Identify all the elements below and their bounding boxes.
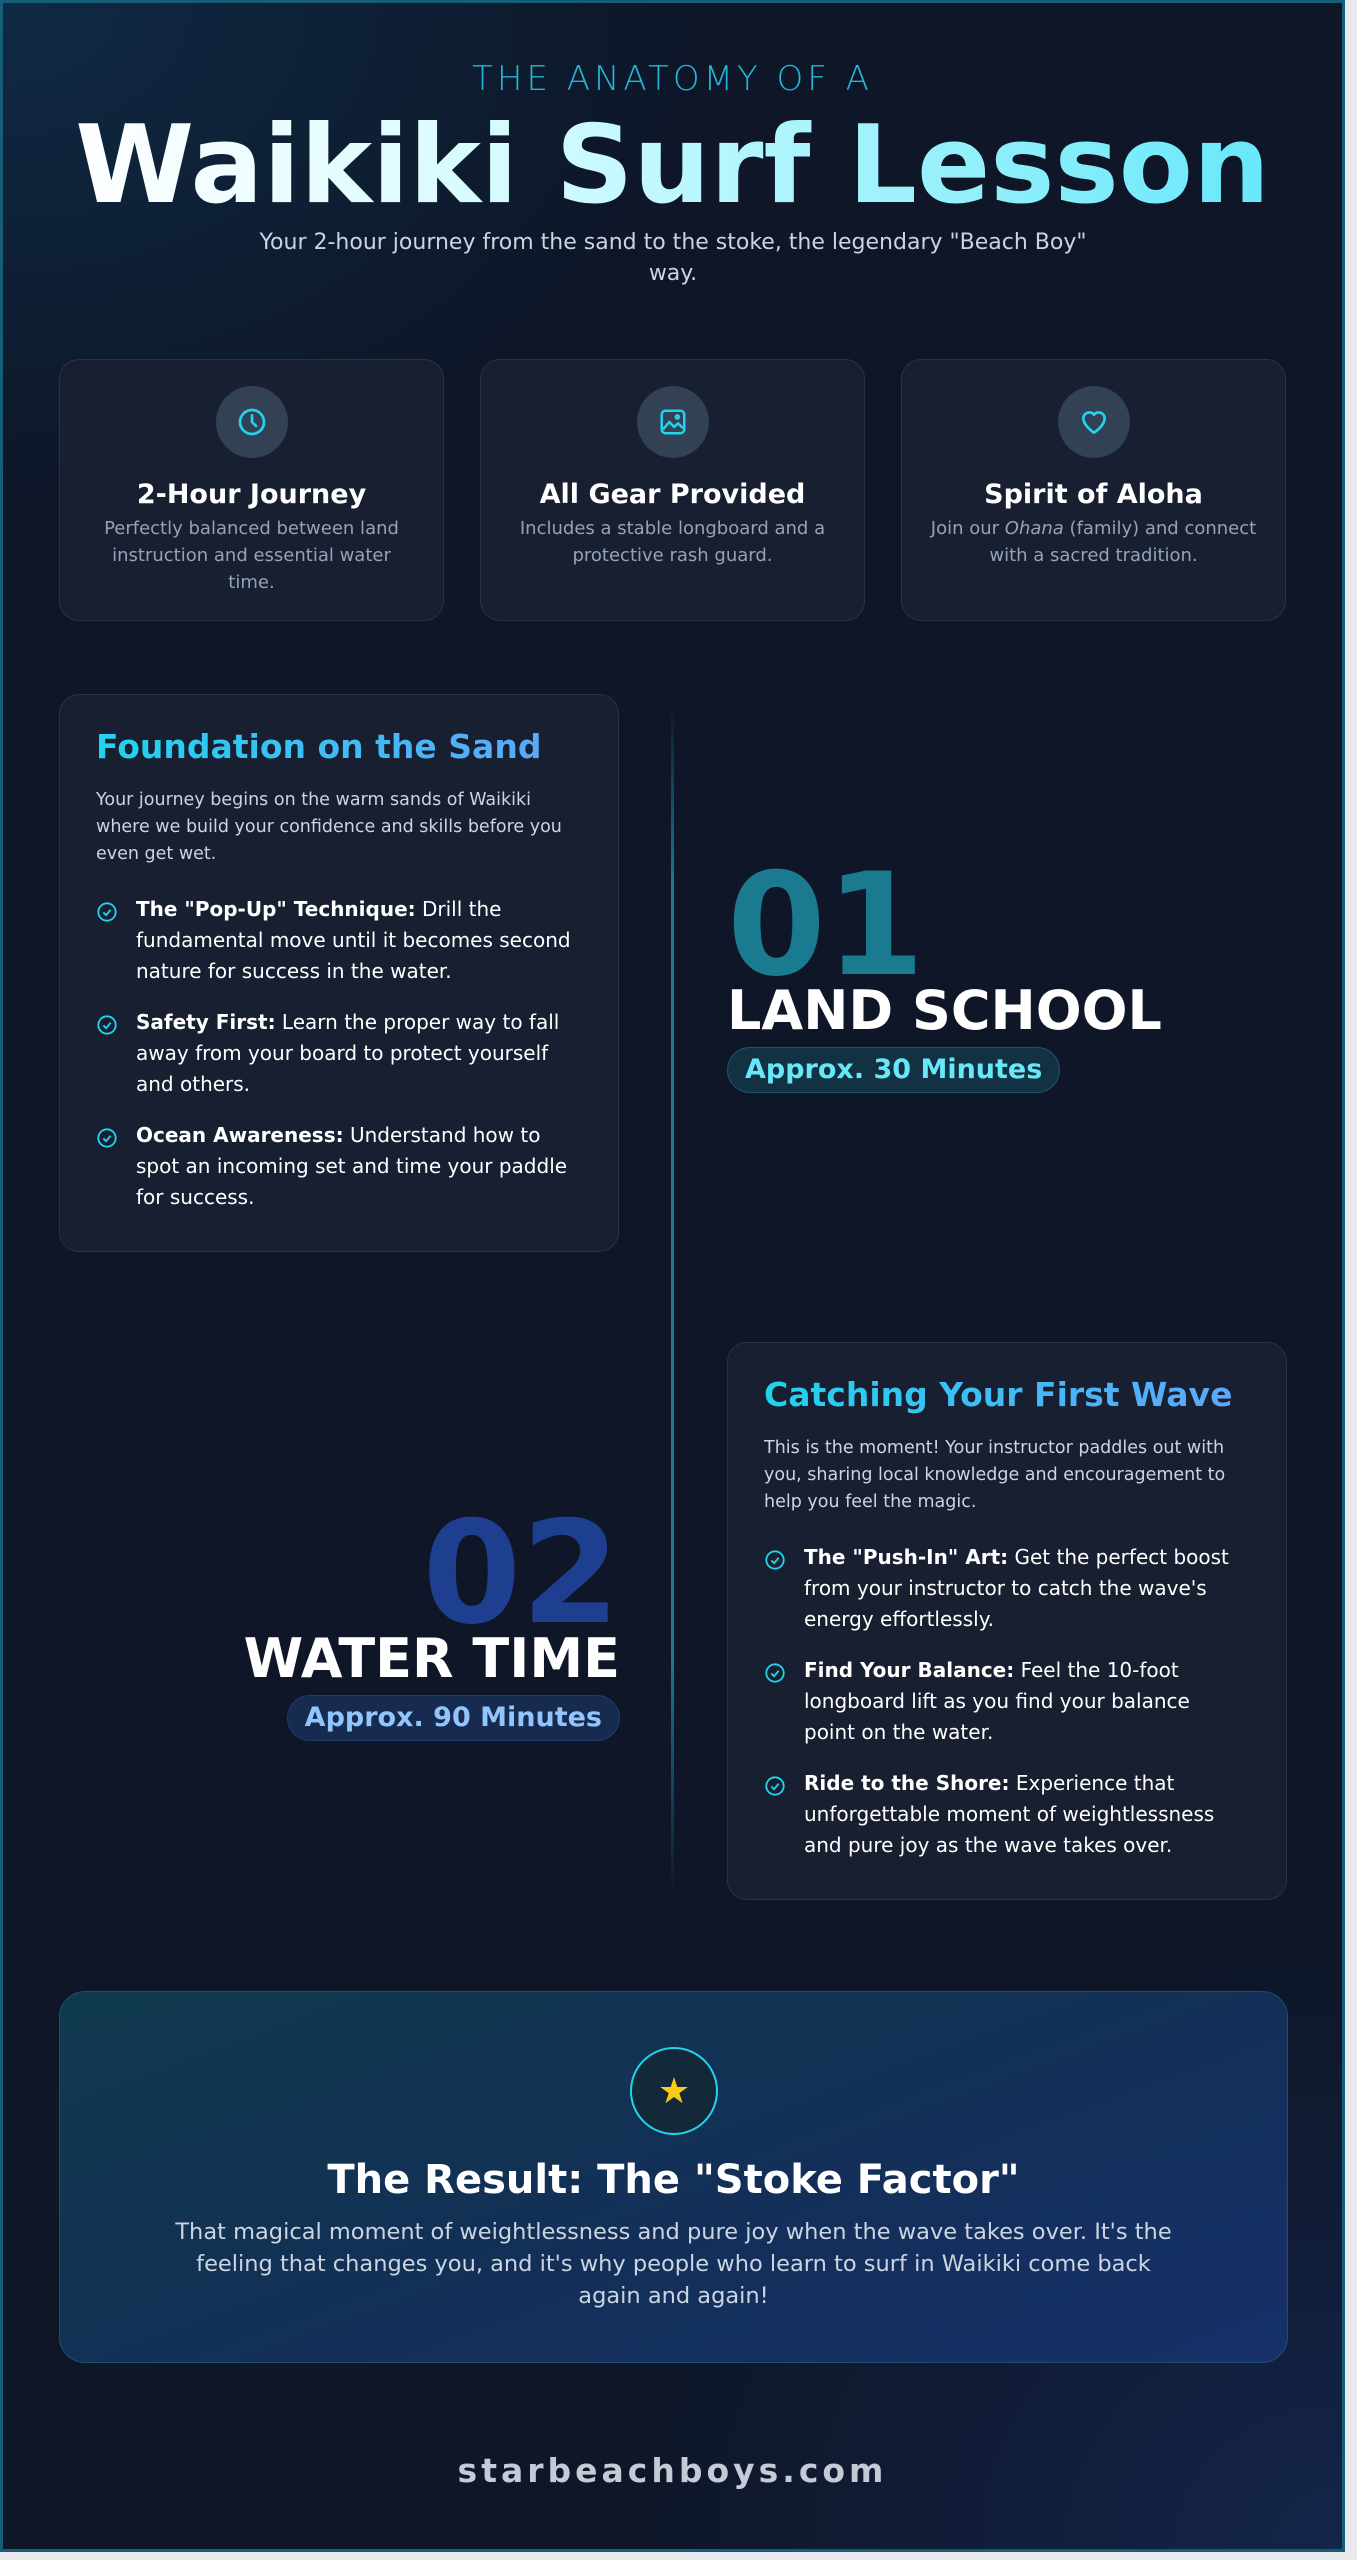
badge <box>287 1695 620 1741</box>
list item: Ride to the Shore: Experience that unforgettable moment of weightlessness and pure joy as the wave takes over. <box>804 1771 1214 1857</box>
panel: catching your first wave <box>727 1342 1287 1900</box>
icon: star <box>630 2047 718 2135</box>
main title: Waikiki Surf Lesson <box>75 103 1270 228</box>
step 02 label <box>244 1491 620 1741</box>
list item: Ocean Awareness: Understand how to spot an incoming set and time your paddle for success. <box>136 1123 567 1209</box>
heading: All Gear Provided <box>540 479 805 510</box>
step 01 label <box>727 843 1162 1093</box>
intro: Your journey begins on the warm sands of Waikiki where we build your confidence and skills before you even get wet. <box>96 790 562 864</box>
list item: Safety First: Learn the proper way to fall away from your board to protect yourself and others. <box>136 1010 559 1096</box>
heading: Catching Your First Wave <box>764 1375 1232 1414</box>
heading: 2-Hour Journey <box>137 479 366 510</box>
icon: star: ★ <box>658 2070 690 2112</box>
number: 01 <box>727 843 925 1008</box>
text: Includes a stable longboard and a protective rash guard. <box>520 518 825 566</box>
badge: Approx. 90 Minutes <box>305 1702 602 1733</box>
step title: LAND SCHOOL <box>727 979 1162 1042</box>
icon: image <box>637 386 709 458</box>
text: That magical moment of weightlessness and pure joy when the wave takes over. It's the feeling that changes you, and it's why people who learn to surf in Waikiki come back again and again! <box>175 2219 1172 2309</box>
badge: Approx. 30 Minutes <box>745 1054 1042 1085</box>
text: Join our Ohana (family) and connect with a sacred tradition. <box>931 518 1256 566</box>
footer: starbeachboys.com <box>458 2451 887 2490</box>
step title: WATER TIME <box>244 1627 620 1690</box>
heading: Foundation on the Sand <box>96 727 541 766</box>
panel: feature gear <box>480 359 865 621</box>
heading: Spirit of Aloha <box>984 479 1203 510</box>
icon: heart <box>1058 386 1130 458</box>
icon: clock <box>216 386 288 458</box>
panel: feature 2-hour journey <box>59 359 444 621</box>
timeline line <box>671 703 674 1898</box>
kicker heading: THE ANATOMY OF A <box>472 59 873 99</box>
list item: Find Your Balance: Feel the 10-foot longboard lift as you find your balance point on the water. <box>804 1658 1190 1744</box>
list item: The "Pop-Up" Technique: Drill the fundamental move until it becomes second nature for success in the water. <box>136 897 571 983</box>
badge <box>727 1047 1060 1093</box>
heading: The Result: The "Stoke Factor" <box>327 2157 1020 2203</box>
number: 02 <box>422 1491 620 1656</box>
panel: result stoke factor <box>59 1991 1288 2363</box>
intro: This is the moment! Your instructor paddles out with you, sharing local knowledge and encouragement to help you feel the magic. <box>764 1438 1225 1512</box>
panel: feature aloha <box>901 359 1286 621</box>
subtitle: Your 2-hour journey from the sand to the stoke, the legendary "Beach Boy" way. <box>260 230 1086 286</box>
text: Perfectly balanced between land instruction and essential water time. <box>104 518 399 593</box>
list item: The "Push-In" Art: Get the perfect boost from your instructor to catch the wave's energy effortlessly. <box>804 1545 1229 1631</box>
panel: foundation on the sand <box>59 694 619 1252</box>
